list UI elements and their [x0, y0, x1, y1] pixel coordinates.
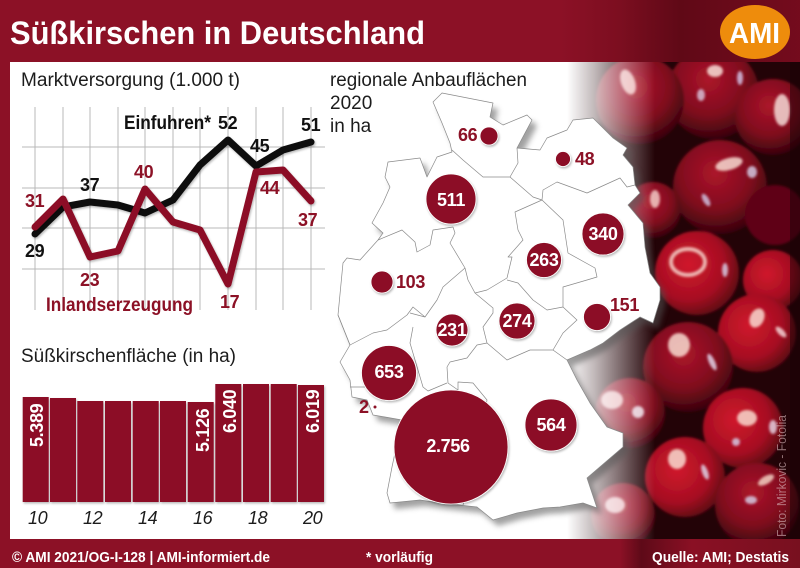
values: domestic: 31	[25, 191, 45, 211]
bubble values: inside: 340	[589, 224, 618, 244]
year axis: 18	[248, 508, 268, 528]
bubble: Hessen	[436, 314, 468, 346]
values: imports: 45	[250, 136, 270, 156]
left border	[0, 62, 10, 539]
line: Einfuhren	[35, 140, 311, 234]
bar chart: Süßkirschenfläche	[21, 346, 324, 528]
bubble values: inside: 511	[437, 190, 465, 210]
values: domestic: 44	[260, 178, 280, 198]
year axis: 10	[28, 508, 48, 528]
bubble values: inside: 564	[537, 415, 566, 435]
copyright: © AMI 2021/OG-I-128 | AMI-informiert.de	[12, 549, 270, 566]
series label: Inlandserzeugung: Inlandserzeugung	[46, 295, 193, 316]
footer band	[0, 539, 800, 568]
year axis: 14	[138, 508, 158, 528]
values: imports: 52	[218, 113, 238, 133]
chart heading: Süßkirschenfläche (in ha)	[21, 346, 236, 367]
map: Germany	[338, 93, 665, 526]
state borders	[338, 148, 635, 505]
bar values: 6.019	[303, 389, 323, 433]
bar values: 5.389	[27, 403, 47, 447]
year axis: 16	[193, 508, 214, 528]
bubble: Mecklenburg-Vorpommern	[556, 152, 570, 166]
map heading	[330, 70, 527, 137]
values: imports: 37	[80, 175, 100, 195]
bubble: Thüringen	[499, 303, 535, 339]
bubble: Bayern	[525, 399, 577, 451]
year axis: 20	[302, 508, 323, 528]
bubble: Rheinland-Pfalz	[362, 346, 416, 400]
bubble values: inside: 2.756	[426, 436, 470, 456]
bubble: Sachsen	[584, 304, 610, 330]
bubble values: inside	[375, 190, 618, 456]
values: domestic: 37	[298, 210, 318, 230]
bar values	[27, 389, 323, 452]
bubble: Saarland	[374, 406, 376, 408]
line chart: Marktversorgung	[21, 70, 325, 316]
AMI logo: AMI	[729, 18, 780, 50]
bar values: 6.040	[220, 389, 240, 433]
values: imports: 51	[301, 115, 321, 135]
map heading: 2020	[330, 93, 372, 114]
bubble values: outside: 103	[396, 272, 425, 292]
bubble: Schleswig-Holstein	[480, 127, 498, 145]
bar values: 5.126	[193, 408, 213, 452]
year axis: 12	[83, 508, 103, 528]
bars	[23, 384, 324, 502]
bubble values: inside: 263	[530, 250, 559, 270]
bubble values: outside: 48	[575, 149, 595, 169]
chart heading: Marktversorgung (1.000 t)	[21, 70, 240, 91]
bubble values: outside	[359, 125, 639, 417]
values: imports	[25, 113, 321, 261]
photo: cherries	[560, 47, 800, 547]
values: domestic: 17	[220, 292, 240, 312]
bubble values: outside: 151	[610, 295, 639, 315]
title: Süßkirschen in Deutschland	[10, 15, 425, 51]
bubble values: inside: 231	[438, 320, 467, 340]
bubble values: outside: 66	[458, 125, 478, 145]
map outline	[338, 93, 660, 520]
footnote: * vorläufig	[366, 549, 433, 566]
map bubbles	[359, 125, 639, 504]
bubble: Niedersachsen	[426, 174, 476, 224]
photo fade to white	[545, 62, 655, 539]
bubble values: outside: 2	[359, 397, 369, 417]
header band	[0, 0, 800, 62]
bubble values: inside: 274	[503, 311, 532, 331]
bubble: Brandenburg	[582, 213, 624, 255]
values: imports: 29	[25, 241, 45, 261]
bubble: Baden-Württemberg	[394, 390, 508, 504]
bubble: Nordrhein-Westfalen	[371, 271, 393, 293]
values: domestic: 23	[80, 270, 100, 290]
values: domestic: 40	[134, 162, 154, 182]
map heading: regionale Anbauflächen	[330, 70, 527, 91]
photo credit: Foto: Mirkovic - Fotolia	[774, 414, 789, 537]
bubble: Sachsen-Anhalt	[526, 242, 562, 278]
year axis	[28, 508, 323, 528]
AMI logo	[720, 5, 790, 59]
bubble values: inside: 653	[375, 362, 404, 382]
source: Quelle: AMI; Destatis	[652, 549, 789, 566]
map heading: in ha	[330, 116, 372, 137]
values: domestic	[25, 162, 318, 312]
line: Inlandserzeugung	[35, 170, 311, 284]
series label: Einfuhren: Einfuhren*	[124, 113, 212, 134]
